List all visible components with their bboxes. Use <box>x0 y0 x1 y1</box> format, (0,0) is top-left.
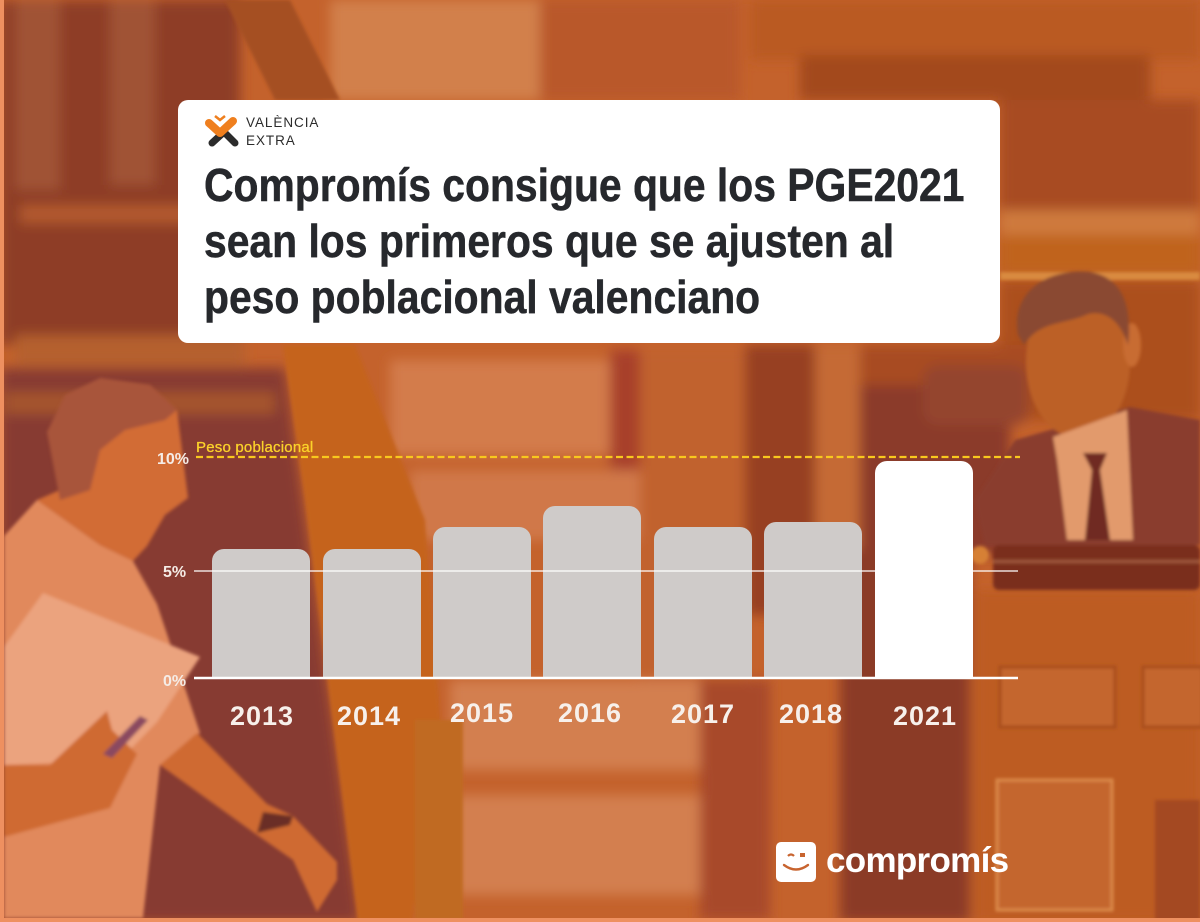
chair back <box>923 365 1028 425</box>
bar 2021 <box>875 461 973 678</box>
headline text: peso poblacional valenciano <box>204 271 760 323</box>
headline text <box>204 159 964 323</box>
head <box>37 378 188 561</box>
x axis labels <box>230 698 957 731</box>
icon: València Extra mark <box>205 115 238 146</box>
brand name: VALÈNCIA <box>246 115 319 130</box>
right arm and hand <box>160 733 337 912</box>
brand: València Extra logo <box>205 115 319 148</box>
bars 2013–2018 <box>212 506 862 678</box>
x axis labels: 2013 <box>230 701 294 731</box>
x axis labels: 2014 <box>337 701 401 731</box>
axis baseline 0% <box>194 677 1018 679</box>
y axis labels: 5% <box>163 564 186 581</box>
banister <box>283 345 440 922</box>
brand name <box>246 115 319 148</box>
x axis labels: 2016 <box>558 698 622 728</box>
man on right: suit, shirt, tie, head <box>975 407 1200 545</box>
icon: winking smiley <box>776 842 816 882</box>
x axis labels: 2017 <box>671 699 735 729</box>
leather rail <box>993 545 1200 590</box>
left forearm and hand <box>4 711 137 837</box>
logo wordmark: compromís <box>826 841 1008 880</box>
papers <box>4 593 200 765</box>
woodwork panels, lower right <box>1000 667 1115 727</box>
x axis labels: 2018 <box>779 699 843 729</box>
y axis labels <box>157 451 189 690</box>
brand name: EXTRA <box>246 133 296 148</box>
x axis labels: 2021 <box>893 701 957 731</box>
y axis labels: 0% <box>163 673 186 690</box>
logo: Compromís <box>776 841 1008 882</box>
headline text: Compromís consigue que los PGE2021 <box>204 159 964 211</box>
headline text: sean los primeros que se ajusten al <box>204 215 894 267</box>
reference line: peso poblacional: Peso poblacional <box>196 439 313 456</box>
x axis labels: 2015 <box>450 698 514 728</box>
gridline 5% <box>194 570 1018 572</box>
headline card <box>178 100 1000 343</box>
y axis labels: 10% <box>157 451 189 468</box>
man on left: shirt <box>4 500 200 918</box>
